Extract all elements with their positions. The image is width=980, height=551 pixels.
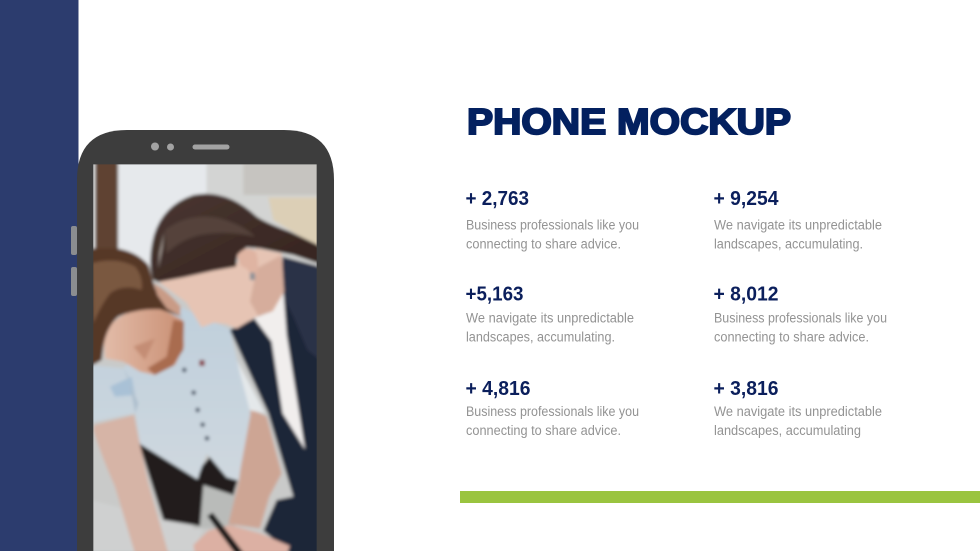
woman's white shirt xyxy=(254,290,305,449)
stat: 9,254 xyxy=(714,188,882,252)
stat: 4,816: Business professionals like you xyxy=(466,404,639,419)
man's hair xyxy=(90,248,182,367)
stat: 3,816 xyxy=(714,378,882,438)
phone camera and speaker xyxy=(151,142,230,150)
woman's ear xyxy=(237,249,258,275)
stat: 9,254: + 9,254 xyxy=(714,188,779,210)
green accent bar xyxy=(460,491,980,503)
stat: 2,763: + 2,763 xyxy=(466,188,529,210)
stat: 4,816: connecting to share advice. xyxy=(466,423,621,438)
stat: 5,163: +5,163 xyxy=(466,284,524,306)
woman's hair xyxy=(150,194,320,282)
woman's neck and face xyxy=(157,248,284,329)
stat: 9,254: We navigate its unpredictable xyxy=(714,218,882,232)
phone mockup xyxy=(71,130,334,551)
hands xyxy=(193,525,290,551)
stat: 3,816: landscapes, accumulating xyxy=(714,423,861,438)
stat: 2,763 xyxy=(466,188,639,252)
stat: 8,012: Business professionals like you xyxy=(714,310,887,326)
stat: 8,012 xyxy=(714,284,887,344)
stat: 2,763: connecting to share advice. xyxy=(466,236,621,252)
desk xyxy=(94,550,190,551)
stat: 3,816: + 3,816 xyxy=(714,378,778,400)
man's white sleeve xyxy=(238,364,265,414)
stat: 4,816 xyxy=(466,378,639,438)
woman's blazer xyxy=(228,298,317,551)
stat: 3,816: We navigate its unpredictable xyxy=(714,404,882,419)
navy side band xyxy=(0,0,78,551)
stat: 9,254: landscapes, accumulating. xyxy=(714,236,863,252)
stat: 5,163 xyxy=(466,284,634,344)
stat: 8,012: + 8,012 xyxy=(714,284,778,306)
stat: 5,163: We navigate its unpredictable xyxy=(466,310,634,326)
phone side buttons xyxy=(71,226,77,296)
man's face xyxy=(103,308,184,375)
stat: 5,163: landscapes, accumulating. xyxy=(466,330,615,344)
title: PHONE MOCKUP xyxy=(467,101,791,142)
stat: 2,763: Business professionals like you xyxy=(466,218,639,232)
man's left forearm xyxy=(93,415,168,551)
photo: two colleagues at a desk xyxy=(90,160,320,551)
pen xyxy=(207,513,244,551)
man's right forearm xyxy=(228,407,282,528)
man's shirt xyxy=(90,307,251,481)
shirt buttons xyxy=(182,360,209,441)
man's dark trousers xyxy=(138,442,238,526)
stat: 8,012: connecting to share advice. xyxy=(714,330,869,344)
phone body xyxy=(77,130,334,551)
stat: 4,816: + 4,816 xyxy=(466,378,530,400)
